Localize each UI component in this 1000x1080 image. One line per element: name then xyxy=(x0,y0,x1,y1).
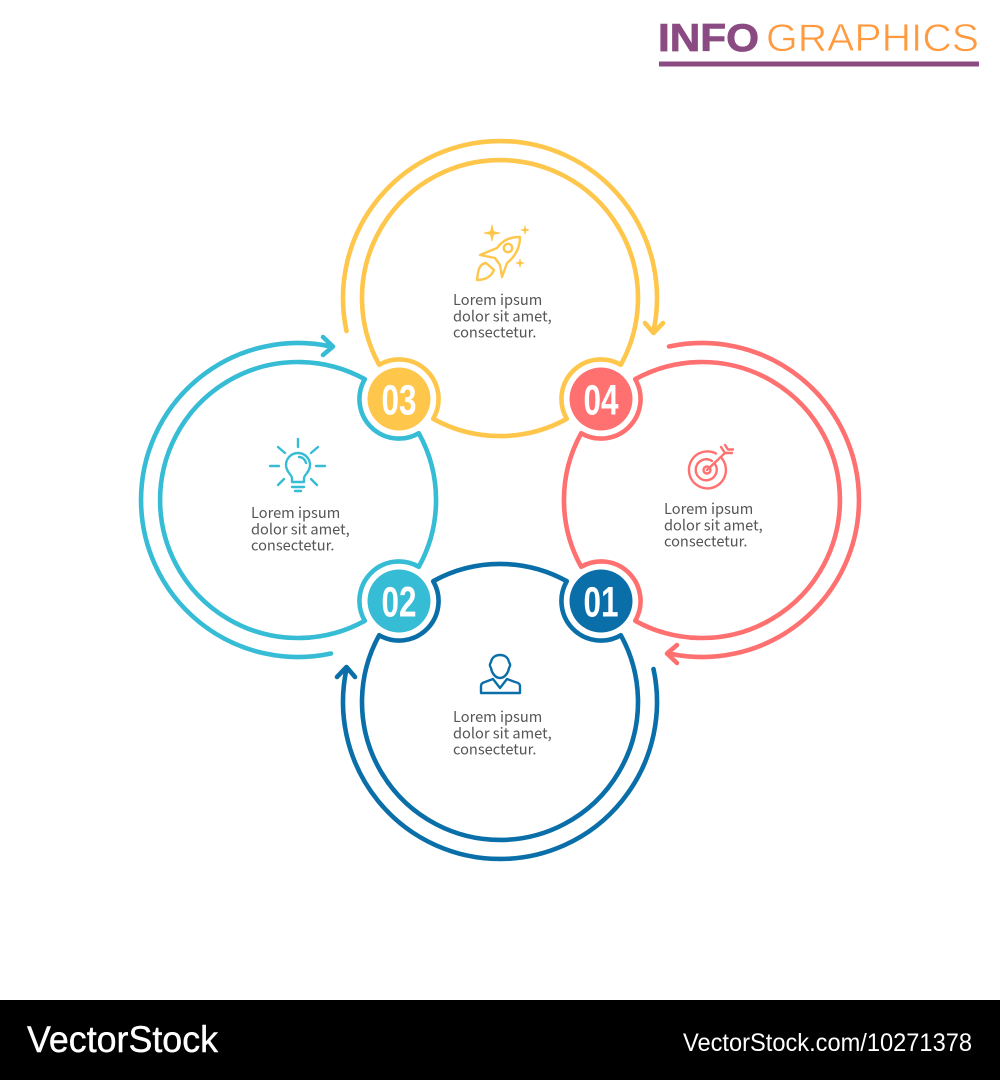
text: step 01 description: consectetur. xyxy=(453,739,536,760)
icon: rocket xyxy=(477,225,529,280)
cyan ring outline xyxy=(160,362,436,638)
badge 03: 03 xyxy=(382,376,416,424)
icon: target xyxy=(689,445,733,488)
text: step 03 description: Lorem ipsum xyxy=(453,289,542,310)
panel: step 04 coral xyxy=(564,343,859,663)
text: step 03 description: dolor sit amet, xyxy=(453,305,552,326)
coral outer arrow xyxy=(667,343,859,663)
footer brand: VectorStock xyxy=(27,1019,218,1060)
badge 02 xyxy=(368,570,430,632)
blue ring outline xyxy=(362,564,638,840)
icon: person xyxy=(481,655,520,693)
text: step 02 description: Lorem ipsum xyxy=(251,502,340,523)
badge 01 xyxy=(570,570,632,632)
footer bar xyxy=(0,1000,1000,1080)
coral ring outline xyxy=(564,362,840,638)
title: infographics logo xyxy=(658,17,979,66)
title underline xyxy=(659,62,979,66)
blue outer arrow xyxy=(337,667,657,859)
text: step 02 description: dolor sit amet, xyxy=(251,518,350,539)
text: step 04 description: Lorem ipsum xyxy=(664,498,753,519)
panel: step 03 yellow xyxy=(343,141,663,436)
title word: info: INFO xyxy=(658,17,759,60)
panel: step 01 blue xyxy=(337,564,657,859)
cyan outer arrow xyxy=(141,337,333,657)
title word: graphics: GRAPHICS xyxy=(766,17,979,60)
footer url: VectorStock.com/10271378 xyxy=(683,1029,972,1057)
text: step 04 description: dolor sit amet, xyxy=(664,514,763,535)
text: step 02 description: consectetur. xyxy=(251,535,334,556)
badge 01: 01 xyxy=(584,578,618,626)
panel: step 02 cyan xyxy=(141,337,436,657)
text: step 04 description: consectetur. xyxy=(664,531,747,552)
icon: light bulb xyxy=(270,439,325,491)
text: step 01 description: dolor sit amet, xyxy=(453,722,552,743)
badge 02: 02 xyxy=(382,578,416,626)
yellow outer arrow xyxy=(343,141,663,333)
yellow ring outline xyxy=(362,160,638,436)
text: step 03 description: consectetur. xyxy=(453,322,536,343)
badge 03 xyxy=(368,368,430,430)
badge 04: 04 xyxy=(584,376,619,424)
badge 04 xyxy=(570,368,632,430)
text: step 01 description: Lorem ipsum xyxy=(453,706,542,727)
